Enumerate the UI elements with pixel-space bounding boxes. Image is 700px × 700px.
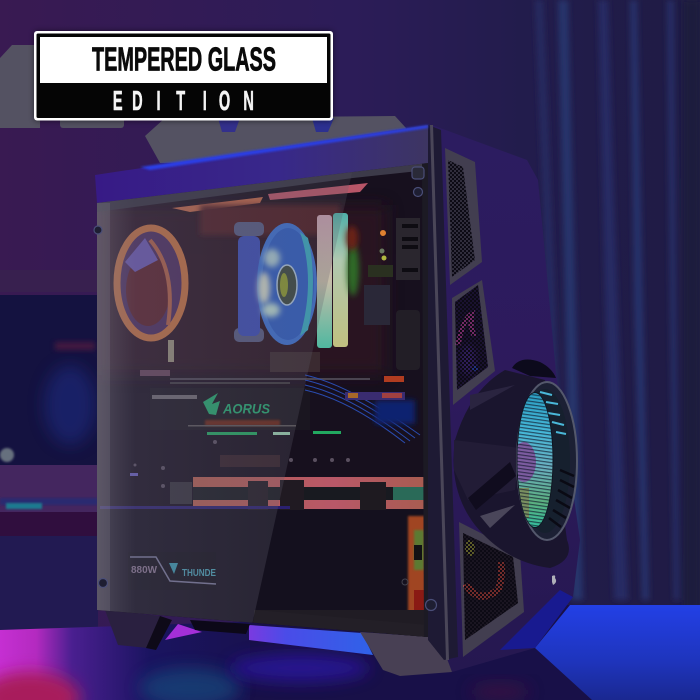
- brand text: THUNDE: [182, 567, 216, 579]
- CPU cooler blue fan: [234, 222, 317, 345]
- curtains: [535, 0, 700, 610]
- RGB front fan ring: [512, 382, 577, 540]
- wattage text: 880W: [131, 565, 158, 576]
- blue glow and colored parts: [345, 376, 415, 424]
- bottom red ring fans: [170, 477, 428, 512]
- motherboard bottom details: [130, 440, 350, 488]
- side mesh vent top: [445, 148, 482, 285]
- rear ports panel: [364, 218, 420, 370]
- left foot: [105, 610, 160, 648]
- cyan vent slots: [540, 392, 566, 434]
- case badge dots: [552, 575, 556, 585]
- badge heading: TEMPERED GLASS: [92, 40, 276, 78]
- front fan hood: [454, 360, 569, 568]
- glass panel with interior: [96, 160, 429, 640]
- LED lit area: [518, 393, 552, 527]
- GPU with AORUS logo: [152, 393, 341, 435]
- light glow under case: [165, 624, 373, 655]
- right foot: [360, 632, 452, 676]
- PSU label 880W THUNDER: [130, 556, 216, 585]
- top radiator strips: [172, 183, 368, 235]
- side mesh vent bottom: [459, 522, 524, 657]
- glass screws: [94, 167, 436, 610]
- orange ring fan: [117, 228, 185, 338]
- dark vent slots: [549, 470, 574, 527]
- wall hexagon panels: [0, 45, 406, 163]
- glass reflection: [97, 168, 353, 625]
- top lid: [95, 125, 428, 203]
- computer case: [94, 125, 580, 676]
- front post: [428, 125, 458, 660]
- badge subheading: EDITION: [113, 85, 254, 116]
- memory slots, motherboard lower: [140, 340, 370, 384]
- AORUS wordmark: AORUS: [222, 400, 271, 416]
- AORUS wing logo: [203, 393, 220, 415]
- side panel: [432, 125, 580, 672]
- table surface: [0, 605, 700, 700]
- motherboard glow and LEDs: [346, 226, 393, 296]
- RAM sticks: [317, 213, 348, 348]
- side mesh vent middle: [452, 280, 495, 405]
- PSU shroud: [97, 506, 429, 640]
- badge: tempered glass edition: [34, 31, 333, 121]
- thunder logo: [169, 563, 178, 574]
- cables: [305, 375, 420, 443]
